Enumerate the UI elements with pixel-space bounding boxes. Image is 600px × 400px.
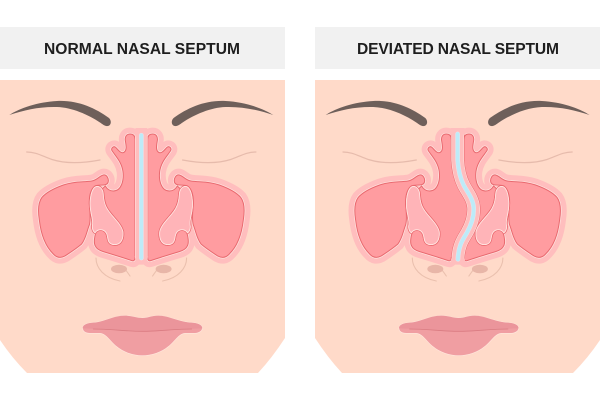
panel: deviated face <box>315 80 600 373</box>
lips <box>399 316 519 356</box>
nose outline and nostrils <box>96 258 187 281</box>
header: deviated nasal septum <box>315 27 600 69</box>
heading: deviated: DEVIATED NASAL SEPTUM <box>357 41 559 58</box>
closed eyes <box>27 152 256 163</box>
heading: normal: NORMAL NASAL SEPTUM <box>44 41 240 58</box>
nose outline and nostrils <box>412 258 503 281</box>
deviated septum <box>458 128 474 265</box>
eyebrows <box>326 101 590 126</box>
left sinus and cavity <box>39 134 141 261</box>
left sinus and cavity <box>355 134 474 261</box>
face background <box>0 80 285 373</box>
straight septum <box>121 128 162 265</box>
sinus halo <box>39 134 244 261</box>
face background <box>315 80 600 373</box>
closed eyes <box>343 152 572 163</box>
nasal cross-section: normal <box>39 128 244 265</box>
panel: normal face <box>0 80 285 373</box>
header: normal nasal septum <box>0 27 285 69</box>
lips <box>83 316 202 356</box>
right sinus and cavity <box>458 134 560 261</box>
right sinus and cavity <box>141 134 244 261</box>
nasal cross-section: deviated <box>355 128 560 265</box>
eyebrows <box>9 101 273 126</box>
sinus halo <box>355 134 560 261</box>
